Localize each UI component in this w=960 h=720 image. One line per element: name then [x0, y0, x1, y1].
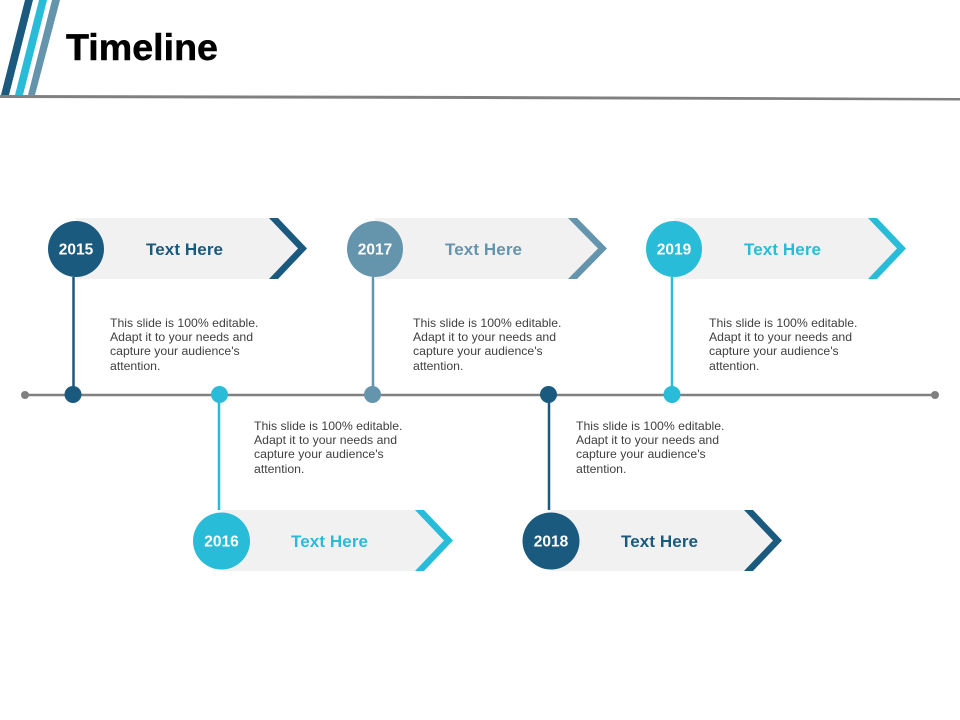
stem 2016 — [218, 395, 220, 510]
badge 2018 — [522, 512, 580, 570]
stem 2019 — [671, 277, 673, 395]
description 2016: This slide is 100% editable. — [254, 419, 402, 433]
description 2017: attention. — [413, 359, 463, 373]
stem 2018 — [548, 395, 550, 510]
header decoration stripes — [1, 0, 60, 95]
description 2015: attention. — [110, 359, 160, 373]
chevron 2015 — [269, 218, 307, 279]
banner 2017 — [375, 218, 599, 279]
year 2015: 2015 — [59, 242, 94, 258]
badge 2015 — [48, 221, 104, 277]
year 2017: 2017 — [358, 242, 392, 258]
year 2018: 2018 — [534, 534, 569, 550]
chevron 2017 — [568, 218, 607, 279]
description 2019: Adapt it to your needs and — [709, 330, 852, 344]
description 2016: attention. — [254, 462, 304, 476]
label 2019: Text Here — [744, 240, 821, 259]
title: Timeline — [66, 27, 218, 68]
label 2017: Text Here — [445, 240, 522, 259]
node 2015 — [64, 386, 82, 403]
banner 2015 — [76, 218, 300, 279]
milestone 2016 — [193, 386, 453, 571]
label 2016: Text Here — [291, 532, 368, 551]
badge 2017 — [347, 221, 403, 277]
description 2017: capture your audience's — [413, 344, 543, 358]
year 2019: 2019 — [657, 242, 692, 258]
description 2019: This slide is 100% editable. — [709, 316, 857, 330]
badge 2016 — [193, 512, 250, 570]
label 2018: Text Here — [621, 532, 698, 551]
milestone 2019 — [646, 218, 906, 403]
chevron 2019 — [868, 218, 906, 279]
year 2016: 2016 — [204, 534, 239, 550]
description 2017: This slide is 100% editable. — [413, 316, 561, 330]
banner 2018 — [551, 510, 775, 571]
description 2018: Adapt it to your needs and — [576, 433, 719, 447]
banner 2019 — [674, 218, 899, 279]
node 2017 — [364, 386, 381, 403]
node 2019 — [664, 386, 680, 403]
description 2016: Adapt it to your needs and — [254, 433, 397, 447]
node 2016 — [211, 386, 228, 403]
description 2018: capture your audience's — [576, 447, 706, 461]
stem 2017 — [372, 277, 374, 395]
description 2018: attention. — [576, 462, 626, 476]
banner 2016 — [222, 510, 446, 571]
description 2019: capture your audience's — [709, 344, 839, 358]
description 2017: Adapt it to your needs and — [413, 330, 556, 344]
badge 2019 — [646, 221, 702, 277]
timeline axis — [21, 391, 939, 399]
description 2018: This slide is 100% editable. — [576, 419, 724, 433]
description 2015: Adapt it to your needs and — [110, 330, 253, 344]
stem 2015 — [72, 277, 75, 395]
description 2016: capture your audience's — [254, 447, 384, 461]
chevron 2016 — [415, 510, 453, 571]
milestone 2018 — [522, 386, 782, 571]
description 2015: capture your audience's — [110, 344, 240, 358]
milestone 2017 — [347, 218, 607, 403]
label 2015: Text Here — [146, 240, 223, 259]
node 2018 — [540, 386, 557, 403]
chevron 2018 — [744, 510, 782, 571]
description 2019: attention. — [709, 359, 759, 373]
milestone 2015 — [48, 218, 307, 403]
header rule — [0, 95, 960, 100]
description 2015: This slide is 100% editable. — [110, 316, 258, 330]
